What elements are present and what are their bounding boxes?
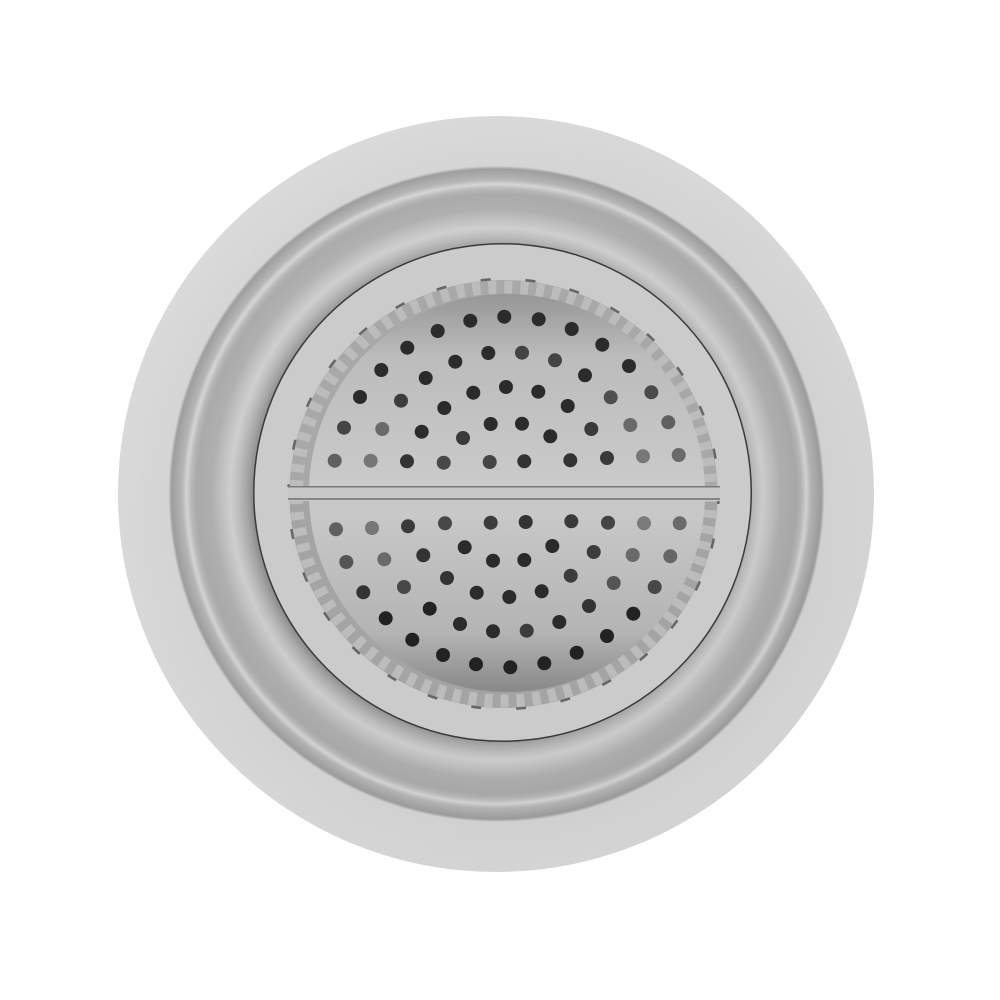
basket: lower half (290, 501, 720, 710)
perforation holes: upper half (328, 310, 686, 470)
outer flange and recessed rings (118, 116, 874, 872)
perforation holes: lower half (329, 514, 687, 674)
inner plate (253, 243, 752, 742)
basket: upper half (287, 278, 718, 487)
illustration: round metal drain strainer seen from above (118, 116, 874, 872)
horizontal divider bar (288, 486, 720, 501)
